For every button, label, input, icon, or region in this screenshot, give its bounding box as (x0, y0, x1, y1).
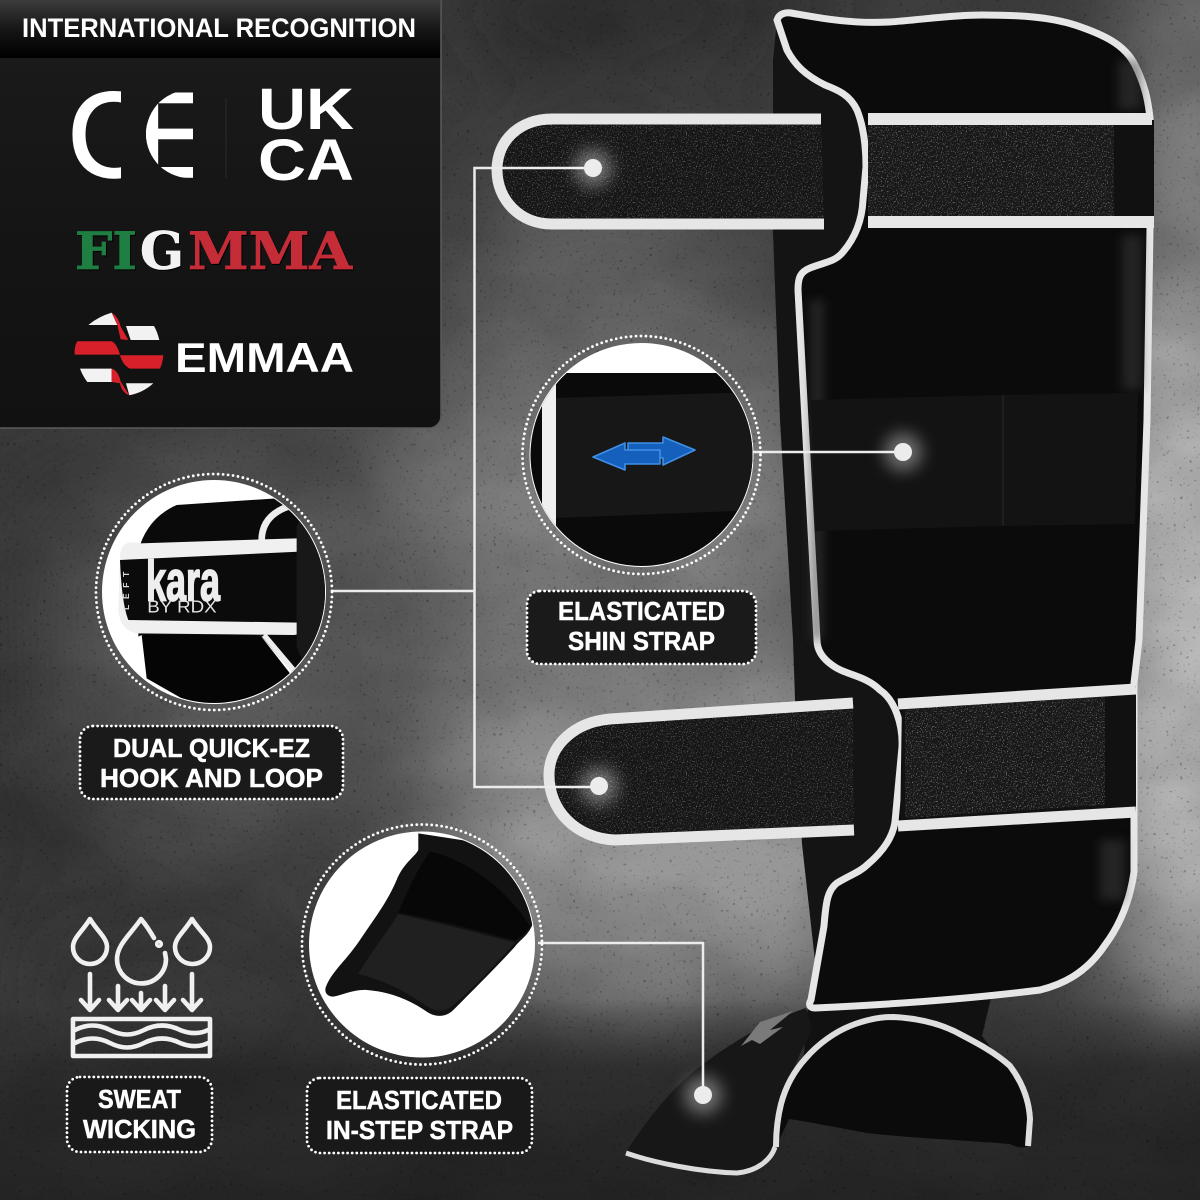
label: elasticated shin strap: ELASTICATED (558, 596, 725, 626)
heading: INTERNATIONAL RECOGNITION (22, 13, 416, 43)
heel block (800, 998, 1030, 1130)
logo: EMMAA: EMMAA (175, 334, 354, 381)
label: elasticated shin strap (527, 591, 756, 664)
logo: CE mark: E (136, 67, 217, 203)
logo: FIGMMA (75, 222, 354, 282)
foot logo mark (741, 1011, 793, 1046)
panel: international recognition (0, 0, 441, 428)
fabric highlights (810, 60, 1142, 900)
detail circle: hook and loop: kara (146, 551, 220, 614)
upper strap left tab (490, 110, 830, 230)
foot arch trim (776, 1017, 1030, 1147)
foot front piece (626, 1008, 812, 1174)
logo: FIGMMA: G (140, 222, 184, 282)
panel background (0, 0, 441, 428)
label: dual quick-ez hook and loop (80, 726, 343, 799)
lower strap left tab (545, 695, 860, 845)
label: elasticated shin strap: SHIN STRAP (568, 626, 715, 656)
lower strap right section (898, 686, 1136, 830)
label: elasticated in-step strap: ELASTICATED (336, 1085, 502, 1115)
shin guard product (490, 13, 1154, 1174)
detail circle: hook and loop: LEFT (121, 571, 131, 610)
logo: CE mark (72, 91, 193, 179)
foot trim (626, 1147, 775, 1173)
main shin panel with white piping (777, 13, 1150, 1008)
panel header bar (0, 0, 440, 58)
logo: FIGMMA: MMA (188, 222, 354, 282)
upper strap right section (860, 119, 1154, 222)
label: dual quick-ez hook and loop: DUAL QUICK-EZ (113, 733, 310, 763)
icon: sweat wicking (73, 919, 210, 1056)
detail circle: hook and loop: BY RDX (147, 597, 217, 617)
logo: UKCA mark (258, 77, 354, 193)
icon: blue stretch arrows (593, 437, 695, 470)
label: sweat wicking: SWEAT (98, 1084, 181, 1114)
logo: UKCA mark: CA (258, 128, 354, 193)
logo: FIGMMA: FI (75, 222, 137, 282)
elastic shin strap (811, 393, 1138, 531)
foot arch padding (776, 1017, 1030, 1147)
icon: EMMAA globe (75, 313, 163, 395)
callout dots (574, 149, 922, 1114)
label: sweat wicking (67, 1077, 212, 1152)
label: elasticated in-step strap (307, 1078, 532, 1153)
logo: CE mark: C (67, 67, 155, 203)
label: sweat wicking: WICKING (83, 1114, 196, 1144)
detail circle: elasticated in-step strap (302, 824, 542, 1064)
label: elasticated in-step strap: IN-STEP STRAP (326, 1115, 513, 1145)
label: dual quick-ez hook and loop: HOOK AND LOOP (100, 763, 323, 793)
logo: EMMAA (75, 313, 354, 395)
detail circle: elasticated shin strap (520, 336, 770, 574)
detail circle: hook and loop (96, 474, 333, 710)
logo: UKCA mark: UK (258, 77, 354, 142)
outer black shell (773, 20, 900, 1006)
leader lines (333, 168, 903, 1095)
